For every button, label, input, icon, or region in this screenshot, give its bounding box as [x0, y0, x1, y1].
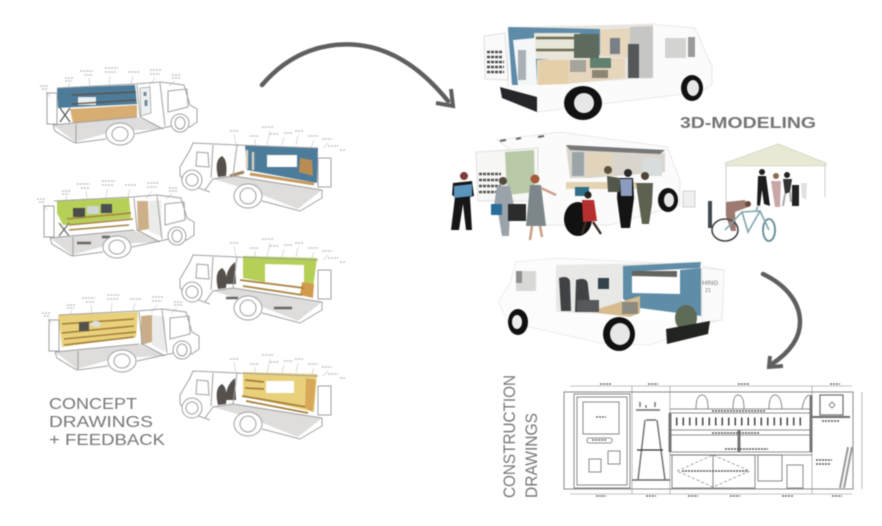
heading: concept drawings + feedback: CONCEPT: [49, 396, 137, 413]
truck sketch: green wall, facing left: [180, 239, 345, 323]
shelving elevation: [670, 395, 812, 488]
heading: 3D-modeling: 3D-MODELING: [680, 115, 816, 132]
heading: concept drawings + feedback: + FEEDBACK: [49, 432, 165, 449]
heading: concept drawings + feedback: [49, 396, 165, 449]
person: behind counter: [604, 166, 620, 192]
panel: 3D truck with visitors: [451, 132, 695, 240]
truck sketch: blue wall, facing left: [180, 127, 345, 211]
panel: 3D truck, front view: [498, 258, 724, 351]
arrow: concept to 3D: [262, 44, 453, 106]
truck sketch: yellow wall, facing left: [180, 355, 345, 439]
person: red cap: [451, 172, 474, 230]
panel: construction plan drawing: [564, 384, 862, 496]
panel: 3D truck, front view: HING: [702, 280, 718, 287]
truck sketch: yellow wall, facing right: [42, 295, 199, 372]
cyclist and bicycle: [712, 200, 775, 241]
panel: 3D truck, front view: 21: [705, 288, 711, 294]
person: man with blue shirt: [617, 169, 634, 228]
person: woman in floral dress: [526, 174, 556, 240]
bike rack: [708, 201, 712, 228]
panel: canopy with cyclist: [708, 144, 826, 241]
arrow: 3D to construction: [763, 274, 800, 367]
storage bay elevation: [812, 395, 852, 488]
people under canopy: [757, 169, 807, 207]
person: ranger: [636, 172, 653, 224]
panel: concept drawings: [37, 68, 345, 439]
people: visitors: [451, 166, 653, 240]
heading: construction drawings: DRAWINGS: [522, 413, 541, 498]
person: child in red: [582, 191, 601, 234]
panel: 3D truck, rear view: [484, 24, 712, 120]
truck sketch: green wall, facing right: [37, 181, 194, 258]
heading: concept drawings + feedback: DRAWINGS: [49, 414, 153, 431]
door elevation: [574, 394, 630, 488]
heading: construction drawings: CONSTRUCTION: [500, 375, 519, 498]
heading: construction drawings: [500, 375, 541, 498]
person: grey shirt: [491, 177, 526, 236]
truck sketch: blue wall, facing right: [40, 68, 197, 145]
a-frame sign: [632, 402, 670, 480]
